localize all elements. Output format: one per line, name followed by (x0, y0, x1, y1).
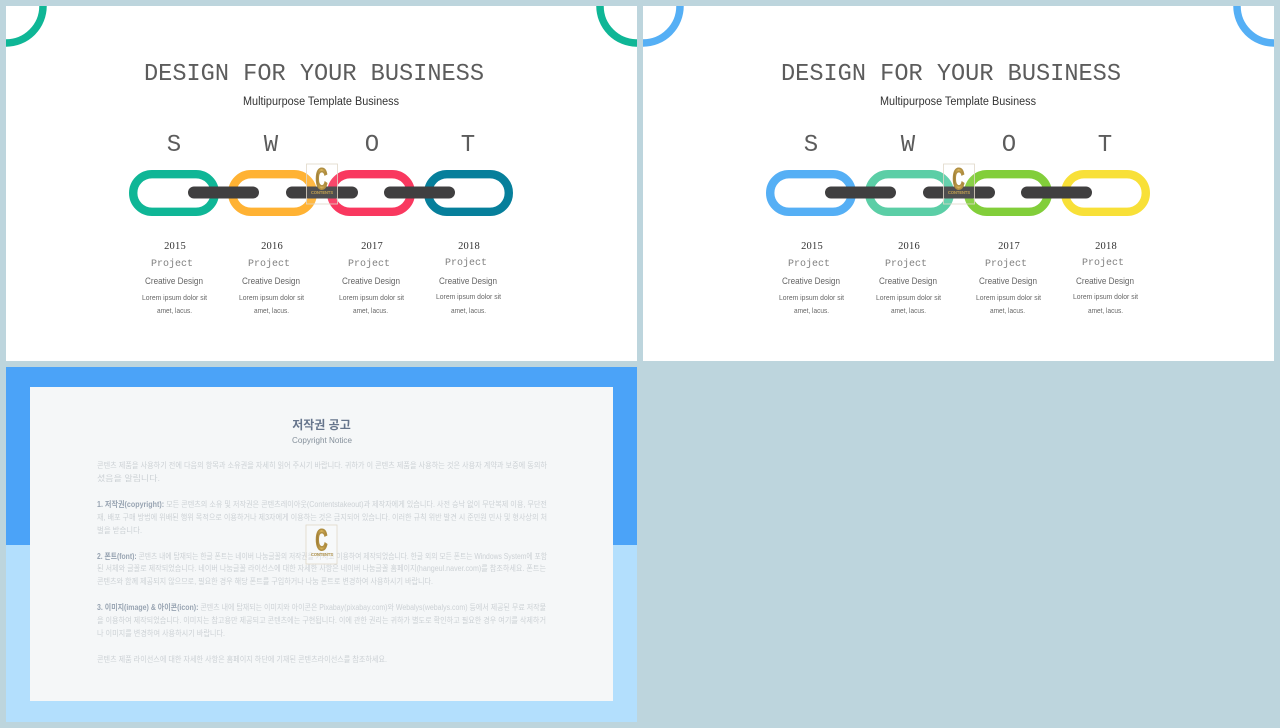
column 3: 2017: amet, lacus. (353, 306, 388, 315)
heading: copyright notice: 저작권 공고 (292, 417, 351, 432)
SWOT letters (167, 132, 475, 159)
column 4: 2018: Lorem ipsum dolor sit (1073, 292, 1139, 301)
watermark logo: CONTENTS (948, 190, 970, 195)
subheading: Multipurpose Template Business (243, 96, 399, 108)
column 3: 2017: Project (985, 258, 1027, 270)
SWOT letters: T (461, 132, 475, 159)
SWOT letters: W (264, 132, 279, 159)
SWOT letters: O (365, 132, 379, 159)
column 3: 2017 (339, 241, 405, 315)
subheading: copyright notice: Copyright Notice (292, 435, 352, 445)
SWOT letters: T (1098, 132, 1112, 159)
column 2: 2016: amet, lacus. (891, 306, 926, 315)
text block: intro: 콘텐츠 제품을 사용하기 전에 다음의 항목과 소유권을 자세히 읽어 주시기 바랍니다. 귀하가 이 콘텐츠 제품을 사용하는 것은 사용자 계약과 보증에 동의하 (97, 460, 548, 470)
text block: image and icon: 을 이용하여 제작되었습니다. 이미지는 참고용만 제공되고 콘텐츠에는 구현됩니다. 이에 관한 권리는 귀하가 별도로 확인하고 필요한 경우 여기를 삭제하거 (97, 615, 546, 625)
column 4: 2018: amet, lacus. (1088, 306, 1123, 315)
column 1: 2015 (779, 241, 845, 315)
heading: DESIGN FOR YOUR BUSINESS (144, 61, 484, 88)
SWOT letters: W (901, 132, 916, 159)
column 2: 2016: 2016 (898, 241, 920, 252)
column 4: 2018: Creative Design (1076, 276, 1134, 287)
column 2: 2016: Lorem ipsum dolor sit (876, 293, 942, 302)
SWOT letters: S (167, 132, 181, 159)
watermark logo: CONTENTS (311, 552, 333, 557)
icon: top-right corner arc (1237, 0, 1280, 43)
column 4: 2018: amet, lacus. (451, 306, 486, 315)
watermark logo: C (316, 163, 327, 196)
column 3: 2017: Creative Design (342, 276, 400, 287)
text block: font: 2. 폰트(font): 콘텐츠 내에 탑재되는 한글 폰트는 네이버 나눔글꼴의 저작권을 가지고 이용하여 제작되었습니다. 한글 외의 모든 폰트는 Windows System에 포함 (97, 551, 548, 561)
column 3: 2017 (976, 241, 1042, 315)
text block: intro: 셨음을 알립니다. (97, 473, 160, 483)
text block: image and icon: 나 이미지를 변경하여 사용하시기 바랍니다. (97, 628, 225, 638)
watermark logo (306, 163, 338, 204)
column 2: 2016: 2016 (261, 241, 283, 252)
icon: top-left corner arc (643, 6, 684, 47)
column 2: 2016: Project (885, 258, 927, 270)
icon: top-right corner arc (596, 6, 637, 47)
column 1: 2015: Creative Design (782, 276, 840, 287)
text block: copyright: 재, 배포 구매 방법에 위배된 행위 목적으로 이용하거나 제3자에게 이용하는 것은 금지되어 있습니다. 이러한 규칙 위반 발견 시 준민원 민사 및 형사상의 처 (97, 512, 547, 522)
watermark logo (944, 163, 974, 204)
column 1: 2015: Project (788, 258, 830, 270)
column 1: 2015: Lorem ipsum dolor sit (779, 293, 845, 302)
text block: copyright (97, 499, 547, 535)
text block: licence reference: 콘텐츠 제품 라이선스에 대한 자세한 사항은 홈페이지 하단에 기재된 콘텐츠라이선스를 참조하세요. (97, 654, 387, 664)
subheading: Multipurpose Template Business (880, 96, 1036, 108)
column 4: 2018: Lorem ipsum dolor sit (436, 292, 502, 301)
column 4: 2018: Project (1082, 257, 1124, 269)
column 4: 2018 (1073, 241, 1139, 315)
column 1: 2015: 2015 (801, 241, 823, 252)
panel: SWOT slide, pastel (606, 0, 1280, 361)
text block: copyright: 벌을 받습니다. (97, 525, 142, 535)
panel: copyright notice slide (6, 367, 637, 722)
column 1: 2015: Creative Design (145, 276, 203, 287)
watermark logo: C (953, 163, 964, 196)
column 3: 2017: Lorem ipsum dolor sit (976, 293, 1042, 302)
SWOT letters: O (1002, 132, 1016, 159)
column 4: 2018 (436, 241, 502, 315)
text block: copyright: 1. 저작권(copyright): 모든 콘텐츠의 소유 및 저작권은 콘텐츠레이아웃(Contentstakeout)과 제작자에게 있습니다. 사전 승낙 없이 무단복제 이용, 무단전 (97, 499, 547, 509)
column 1: 2015: amet, lacus. (157, 306, 192, 315)
SWOT letters (804, 132, 1112, 159)
column 2: 2016 (239, 241, 305, 315)
column 2: 2016: Lorem ipsum dolor sit (239, 293, 305, 302)
SWOT letters: S (804, 132, 818, 159)
column 1: 2015 (142, 241, 208, 315)
column 3: 2017: Project (348, 258, 390, 270)
column 1: 2015: Lorem ipsum dolor sit (142, 293, 208, 302)
column 3: 2017: amet, lacus. (990, 306, 1025, 315)
text block: font: 콘텐츠와 함께 제공되지 않으므로, 필요한 경우 해당 폰트를 구입하거나 나눔 폰트로 변경하여 사용하시기 바랍니다. (97, 576, 433, 586)
text block: font: 된 서체와 글꼴로 제작되었습니다. 네이버 나눔글꼴 라이선스에 대한 자세한 사항은 네이버 나눔글꼴 홈페이지(hangeul.naver.com)를 참조하세요. 폰트는 (97, 563, 546, 573)
column 4: 2018: Creative Design (439, 276, 497, 287)
column 2: 2016: Creative Design (242, 276, 300, 287)
column 1: 2015: Project (151, 258, 193, 270)
text block: intro (97, 460, 548, 483)
column 3: 2017: Creative Design (979, 276, 1037, 287)
column 3: 2017: 2017 (361, 241, 383, 252)
chain diagram (770, 174, 1146, 212)
watermark logo (306, 524, 337, 564)
column 1: 2015: 2015 (164, 241, 186, 252)
column 2: 2016: amet, lacus. (254, 306, 289, 315)
text block: font (97, 551, 548, 586)
column 4: 2018: Project (445, 257, 487, 269)
column 2: 2016 (876, 241, 942, 315)
column 4: 2018: 2018 (458, 241, 480, 252)
heading: DESIGN FOR YOUR BUSINESS (781, 61, 1121, 88)
chain diagram (133, 174, 509, 212)
text block: image and icon (97, 602, 546, 638)
column 2: 2016: Project (248, 258, 290, 270)
column 1: 2015: amet, lacus. (794, 306, 829, 315)
column 4: 2018: 2018 (1095, 241, 1117, 252)
panel: SWOT slide, multicolour (0, 0, 674, 361)
column 3: 2017: 2017 (998, 241, 1020, 252)
column 3: 2017: Lorem ipsum dolor sit (339, 293, 405, 302)
text block: image and icon: 3. 이미지(image) & 아이콘(icon): 콘텐츠 내에 탑재되는 이미지와 아이콘은 Pixabay(pixabay.com)와 Webalys(webalys.com) 등에서 제공된 무료 저작물 (97, 602, 546, 612)
icon: top-left corner arc (0, 0, 43, 43)
watermark logo: C (316, 524, 327, 557)
watermark logo: CONTENTS (311, 190, 333, 195)
column 2: 2016: Creative Design (879, 276, 937, 287)
